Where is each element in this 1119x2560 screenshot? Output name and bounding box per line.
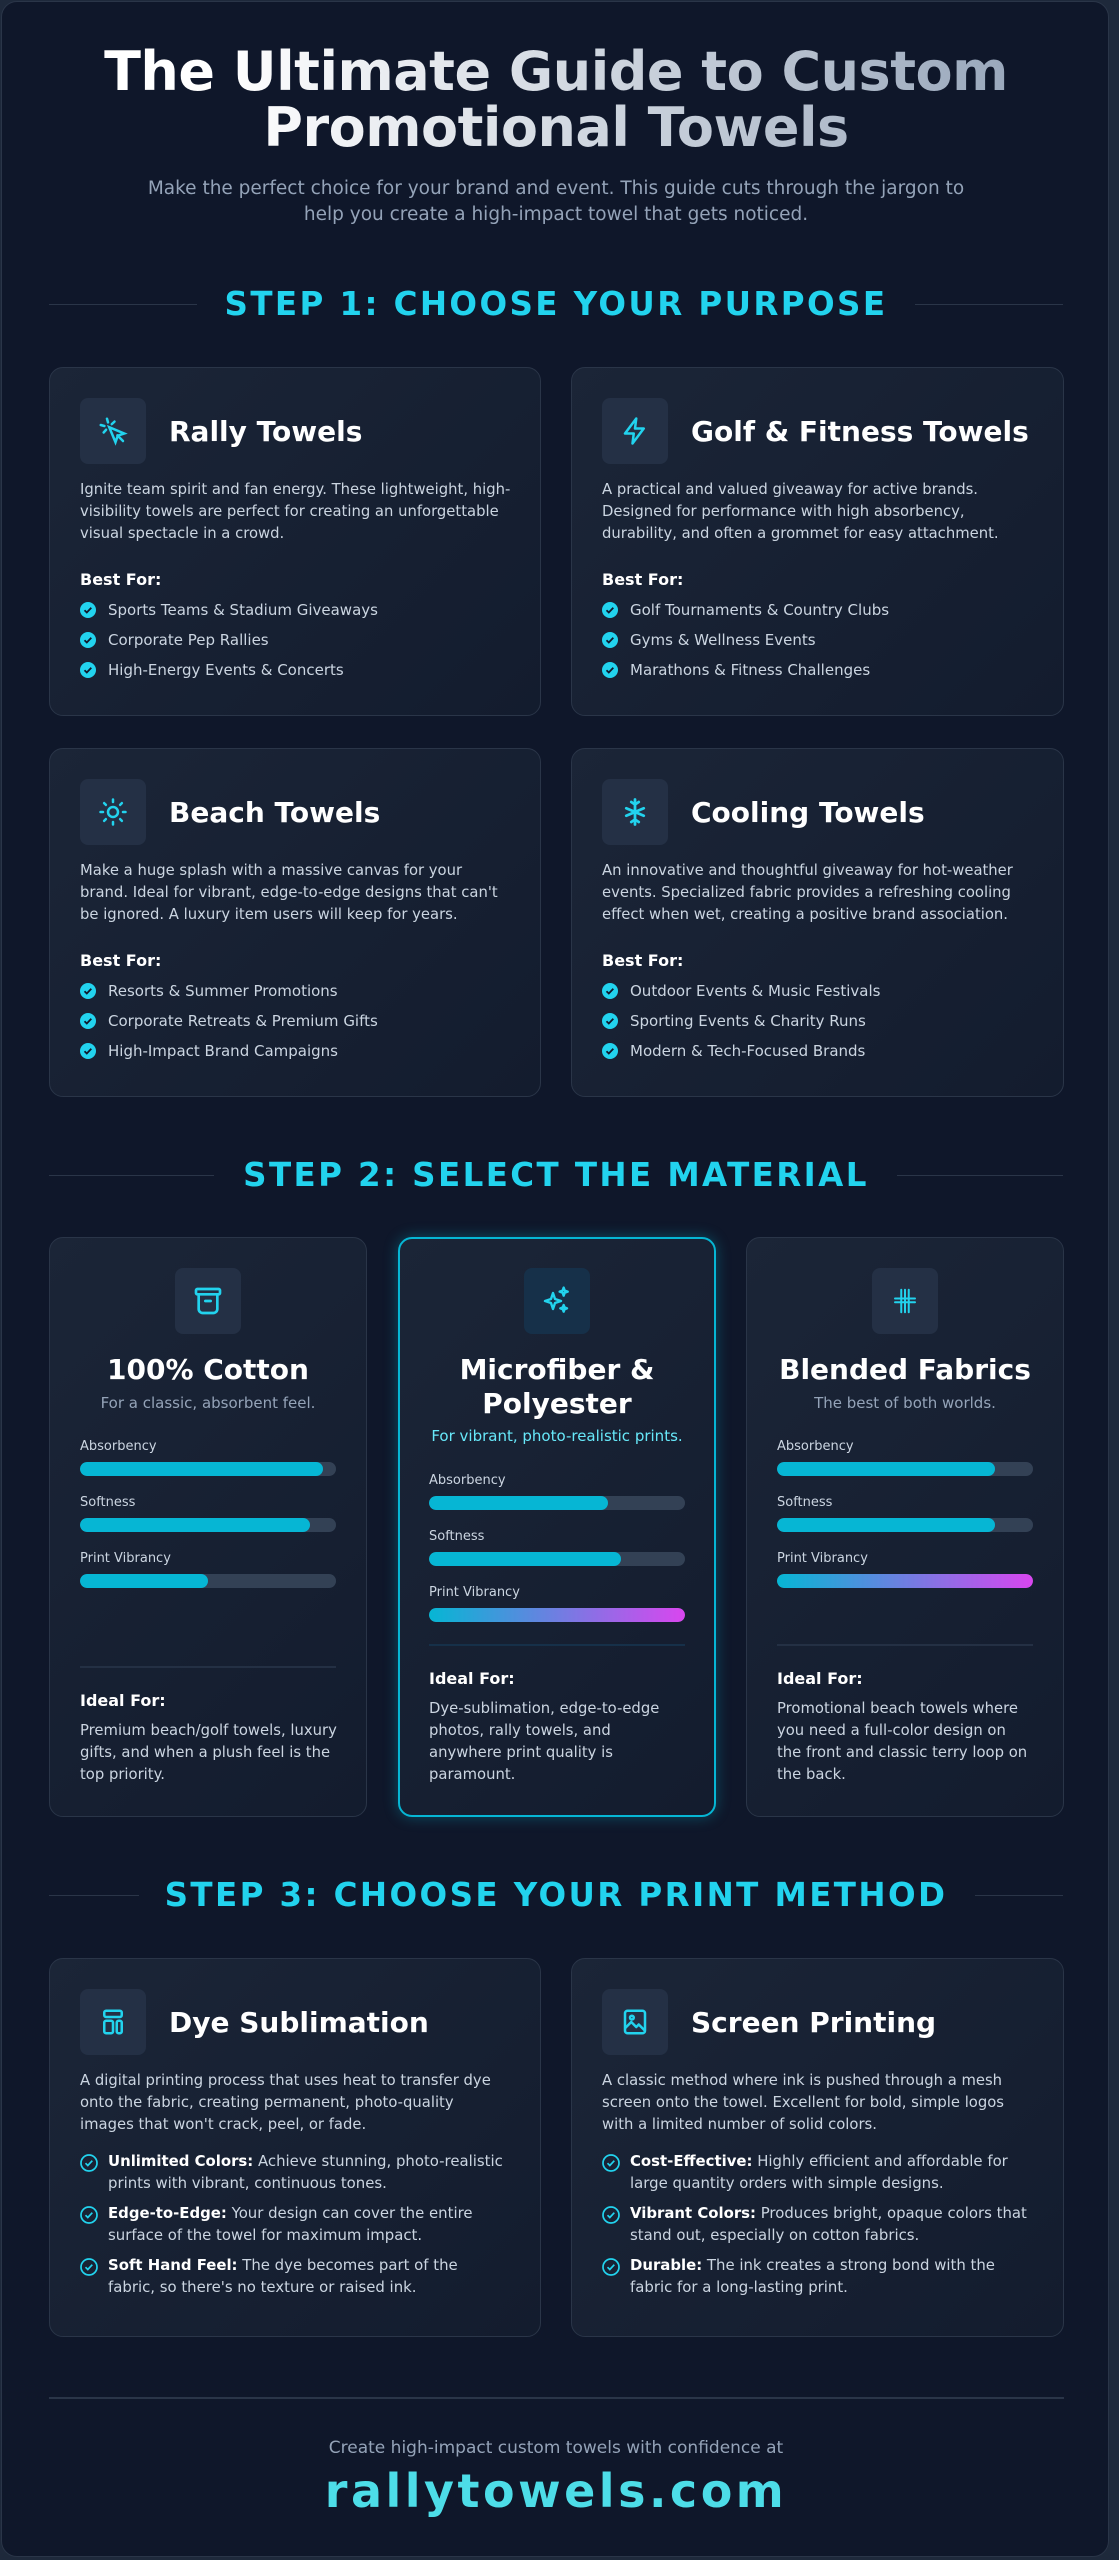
list: benefits: fabric for a long-lasting print. xyxy=(630,2278,848,2296)
card header: dye sublimation xyxy=(80,1989,429,2055)
description: onto the fabric, creating permanent, photo-quality xyxy=(80,2094,454,2111)
list: benefits xyxy=(602,2152,1027,2296)
list: Resorts & Summer Promotions xyxy=(108,982,338,1000)
description: with a limited number of solid colors. xyxy=(602,2116,877,2133)
ideal for: microfiber: anywhere print quality is xyxy=(429,1744,613,1761)
description: images that won't crack, peel, or fade. xyxy=(80,2116,366,2133)
ideal for: cotton: gifts, and when a plush feel is the xyxy=(80,1744,330,1761)
list: Corporate Retreats & Premium Gifts xyxy=(108,1012,378,1030)
icon: bin xyxy=(175,1268,241,1334)
ideal for: cotton: Premium beach/golf towels, luxury xyxy=(80,1722,337,1739)
footer text: Create high-impact custom towels with confidence at xyxy=(329,2438,783,2458)
ideal for: microfiber: photos, rally towels, and xyxy=(429,1722,611,1739)
panel: beach towels xyxy=(49,748,541,1097)
card header: rally xyxy=(80,398,362,464)
list: Modern & Tech-Focused Brands xyxy=(630,1042,865,1060)
subtitle: Make the perfect choice for your brand and event. This guide cuts through the jargon to xyxy=(148,178,964,199)
card header: beach: Beach Towels xyxy=(169,796,380,828)
panel: cotton: For a classic, absorbent feel. xyxy=(101,1394,315,1412)
ideal for: blended: the back. xyxy=(777,1766,846,1783)
card header: golf xyxy=(602,398,1029,464)
list: benefits: Vibrant Colors: Produces bright, opaque colors that xyxy=(630,2204,1027,2222)
footer url: rallytowels.com xyxy=(325,2464,787,2518)
heading: step 1: STEP 1: CHOOSE YOUR PURPOSE xyxy=(225,285,887,323)
bar chart: microfiber: Absorbency xyxy=(429,1473,506,1488)
panel: blended xyxy=(746,1237,1064,1817)
list xyxy=(602,601,889,679)
description: A digital printing process that uses heat to transfer dye xyxy=(80,2072,491,2089)
description: An innovative and thoughtful giveaway for hot-weather xyxy=(602,862,1013,879)
description: brand. Ideal for vibrant, edge-to-edge designs that can't xyxy=(80,884,498,901)
card header: rally: Rally Towels xyxy=(169,414,362,448)
list: Corporate Pep Rallies xyxy=(108,631,269,649)
panel: microfiber: Polyester xyxy=(482,1387,632,1420)
panel: blended: Blended Fabrics xyxy=(779,1353,1031,1386)
bar chart: cotton: Softness xyxy=(80,1495,135,1510)
heading: step 3: STEP 3: CHOOSE YOUR PRINT METHOD xyxy=(165,1876,947,1914)
list: Outdoor Events & Music Festivals xyxy=(630,982,880,1000)
panel: cotton: 100% Cotton xyxy=(107,1353,309,1386)
ideal for: microfiber xyxy=(429,1644,685,1783)
description xyxy=(602,862,1013,923)
list xyxy=(80,982,378,1060)
title: The Ultimate Guide to Custom xyxy=(104,40,1008,103)
bar chart: blended: Print Vibrancy xyxy=(777,1551,868,1566)
description: A classic method where ink is pushed through a mesh xyxy=(602,2072,1002,2089)
list: Marathons & Fitness Challenges xyxy=(630,661,870,679)
list: benefits xyxy=(80,2152,503,2296)
description xyxy=(80,862,498,923)
bar chart: cotton: Print Vibrancy xyxy=(80,1551,171,1566)
panel: cooling towels xyxy=(571,748,1064,1097)
list: Sports Teams & Stadium Giveaways xyxy=(108,601,378,619)
description: screen onto the towel. Excellent for bold, simple logos xyxy=(602,2094,1004,2111)
list: benefits: stand out, especially on cotton fabrics. xyxy=(630,2226,919,2244)
list: benefits: surface of the towel for maximum impact. xyxy=(108,2226,422,2244)
ideal for: blended: you need a full-color design on xyxy=(777,1722,1006,1739)
card header: cooling xyxy=(602,779,925,845)
list: benefits: Durable: The ink creates a strong bond with the xyxy=(630,2256,995,2274)
bar chart: microfiber: Softness xyxy=(429,1529,484,1544)
title: Promotional Towels xyxy=(263,96,849,159)
description xyxy=(80,2072,491,2133)
description: durability, and often a grommet for easy attachment. xyxy=(602,525,999,542)
card header: screen printing: Screen Printing xyxy=(691,2006,936,2038)
panel: blended: The best of both worlds. xyxy=(814,1394,996,1412)
ideal for: microfiber: Ideal For: xyxy=(429,1669,515,1688)
description xyxy=(602,481,999,542)
ideal for: microfiber: paramount. xyxy=(429,1766,515,1783)
description: events. Specialized fabric provides a refreshing cooling xyxy=(602,884,1011,901)
list: benefits: Unlimited Colors: Achieve stunning, photo-realistic xyxy=(108,2152,503,2170)
description: be ignored. A luxury item users will keep for years. xyxy=(80,906,458,923)
description: A practical and valued giveaway for active brands. xyxy=(602,481,978,498)
list: benefits: prints with vibrant, continuous tones. xyxy=(108,2174,387,2192)
description: effect when wet, creating a positive brand association. xyxy=(602,906,1008,923)
panel: microfiber: Microfiber & xyxy=(460,1353,654,1386)
card header: dye sublimation: Dye Sublimation xyxy=(169,2006,429,2038)
bar chart: microfiber: Print Vibrancy xyxy=(429,1585,520,1600)
bar chart: cotton: Absorbency xyxy=(80,1439,157,1454)
bar chart: cotton xyxy=(80,1439,336,1588)
list: Sporting Events & Charity Runs xyxy=(630,1012,866,1030)
list: benefits: Edge-to-Edge: Your design can cover the entire xyxy=(108,2204,473,2222)
ideal for: blended: Promotional beach towels where xyxy=(777,1700,1018,1717)
card header: beach xyxy=(80,779,380,845)
ideal for: blended: the front and classic terry loop on xyxy=(777,1744,1027,1761)
ideal for: cotton xyxy=(80,1666,337,1783)
bar chart: microfiber xyxy=(429,1473,685,1622)
panel: golf & fitness towels xyxy=(571,367,1064,716)
panel: rally towels: Best For: xyxy=(80,570,161,589)
list: Gyms & Wellness Events xyxy=(630,631,816,649)
ideal for: blended xyxy=(777,1644,1033,1783)
list: High-Impact Brand Campaigns xyxy=(108,1042,338,1060)
subtitle xyxy=(148,178,964,225)
ideal for: cotton: Ideal For: xyxy=(80,1691,166,1710)
list xyxy=(80,601,378,679)
card header: screen printing xyxy=(602,1989,936,2055)
list: benefits: large quantity orders with simple designs. xyxy=(630,2174,944,2192)
bar chart: blended xyxy=(777,1439,1033,1588)
ideal for: microfiber: Dye-sublimation, edge-to-edge xyxy=(429,1700,659,1717)
panel: rally towels xyxy=(49,367,541,716)
card header: golf: Golf & Fitness Towels xyxy=(691,414,1029,448)
panel: beach towels: Best For: xyxy=(80,951,161,970)
description: Make a huge splash with a massive canvas for your xyxy=(80,862,462,879)
list: benefits: Soft Hand Feel: The dye becomes part of the xyxy=(108,2256,458,2274)
list: benefits: Cost-Effective: Highly efficient and affordable for xyxy=(630,2152,1008,2170)
panel: dye sublimation xyxy=(49,1958,541,2337)
description: visibility towels are perfect for creating an unforgettable xyxy=(80,503,499,520)
panel: cotton xyxy=(49,1237,367,1817)
list: High-Energy Events & Concerts xyxy=(108,661,344,679)
panel: screen printing xyxy=(571,1958,1064,2337)
description xyxy=(602,2072,1004,2133)
icon: fabric lines xyxy=(872,1268,938,1334)
list: benefits: fabric, so there's no texture or raised ink. xyxy=(108,2278,416,2296)
title xyxy=(2,44,1110,156)
ideal for: blended: Ideal For: xyxy=(777,1669,863,1688)
panel: cooling towels: Best For: xyxy=(602,951,683,970)
ideal for: cotton: top priority. xyxy=(80,1766,165,1783)
description: Ignite team spirit and fan energy. These lightweight, high- xyxy=(80,481,510,498)
icon: sparkles xyxy=(524,1268,590,1334)
bar chart: blended: Softness xyxy=(777,1495,832,1510)
description: Designed for performance with high absorbency, xyxy=(602,503,965,520)
heading: step 2: STEP 2: SELECT THE MATERIAL xyxy=(243,1156,869,1194)
panel: microfiber: For vibrant, photo-realistic prints. xyxy=(431,1427,683,1445)
description: visual spectacle in a crowd. xyxy=(80,525,284,542)
list: Golf Tournaments & Country Clubs xyxy=(630,601,889,619)
card header: cooling: Cooling Towels xyxy=(691,796,925,828)
subtitle: help you create a high-impact towel that gets noticed. xyxy=(304,204,808,225)
list xyxy=(602,982,880,1060)
panel: golf & fitness towels: Best For: xyxy=(602,570,683,589)
description xyxy=(80,481,510,542)
panel: microfiber xyxy=(398,1237,716,1817)
bar chart: blended: Absorbency xyxy=(777,1439,854,1454)
